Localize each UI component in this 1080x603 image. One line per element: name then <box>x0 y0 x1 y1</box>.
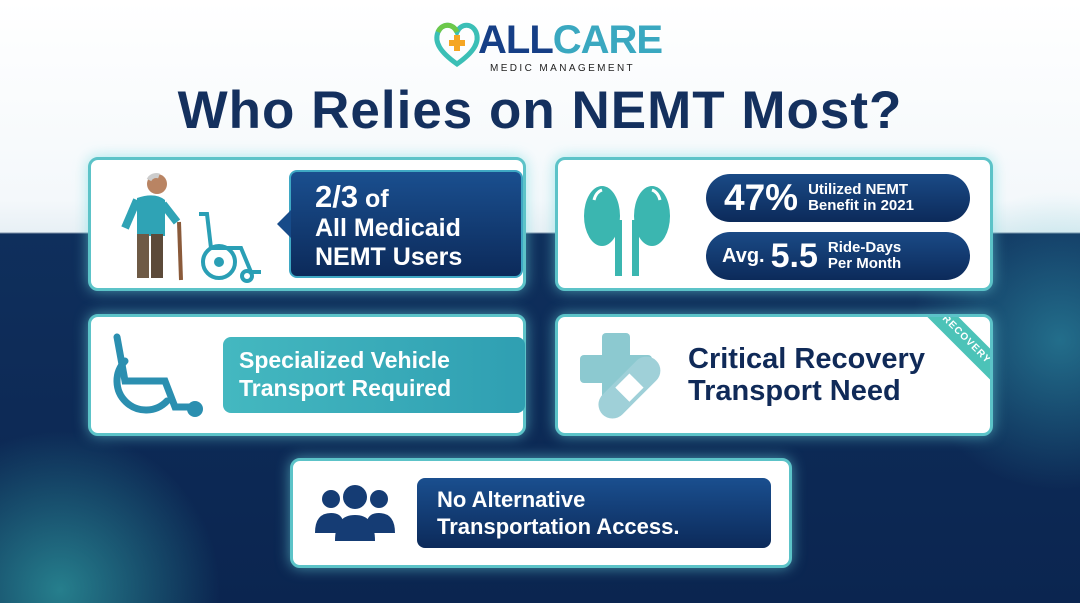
stat pill: 47%: Utilized NEMT <box>808 181 908 198</box>
text box: specialized vehicle: Transport Required <box>239 375 451 401</box>
title: Who Relies on NEMT Most? <box>178 81 902 140</box>
text: critical recovery: Critical Recovery <box>688 343 925 375</box>
text box: no alternative: Transportation Access. <box>437 514 679 539</box>
stat pill: 5.5 ride-days: Avg. <box>722 244 765 266</box>
callout: 2/3 of users: All Medicaid <box>315 214 461 242</box>
icon: cross with bandage <box>580 333 660 418</box>
stat pill: 47%: 47% <box>724 177 798 218</box>
text box: specialized vehicle: Specialized Vehicle <box>239 347 450 373</box>
icon: elderly man with cane <box>121 173 183 280</box>
icon: heart with plus <box>434 22 480 67</box>
icon: kidneys <box>584 186 670 276</box>
ribbon: recovery: RECOVERY <box>940 314 993 366</box>
ribbon: recovery <box>909 283 1023 397</box>
stat pill: 5.5 ride-days: 5.5 <box>771 236 818 274</box>
icon: wheelchair user <box>114 334 203 417</box>
callout: 2/3 of users <box>289 170 523 278</box>
panel: specialized vehicle <box>88 314 526 436</box>
icon: group of people <box>315 485 395 541</box>
text box: no alternative <box>417 478 771 548</box>
logo: MEDIC MANAGEMENT <box>490 63 635 74</box>
panel: seniors <box>88 157 526 291</box>
stat pill: 47%: Benefit in 2021 <box>808 197 914 214</box>
logo: ALLCARE <box>478 18 662 62</box>
stat pill: 47% <box>706 174 970 222</box>
callout: 2/3 of users: 2/3 of <box>315 179 389 214</box>
text: critical recovery <box>688 343 925 407</box>
panel: critical recovery <box>555 314 993 436</box>
text: critical recovery: Transport Need <box>688 375 901 407</box>
stat pill: 5.5 ride-days: Per Month <box>828 255 901 272</box>
stat pill: 5.5 ride-days <box>706 232 970 280</box>
text box: no alternative: No Alternative <box>437 487 585 512</box>
icon: wheelchair <box>199 212 261 283</box>
panel: no alternative <box>290 458 792 568</box>
stat pill: 5.5 ride-days: Ride-Days <box>828 239 901 256</box>
logo <box>434 18 662 74</box>
panel: kidney <box>555 157 993 291</box>
callout: 2/3 of users: NEMT Users <box>315 243 462 271</box>
text box: specialized vehicle <box>223 337 525 413</box>
